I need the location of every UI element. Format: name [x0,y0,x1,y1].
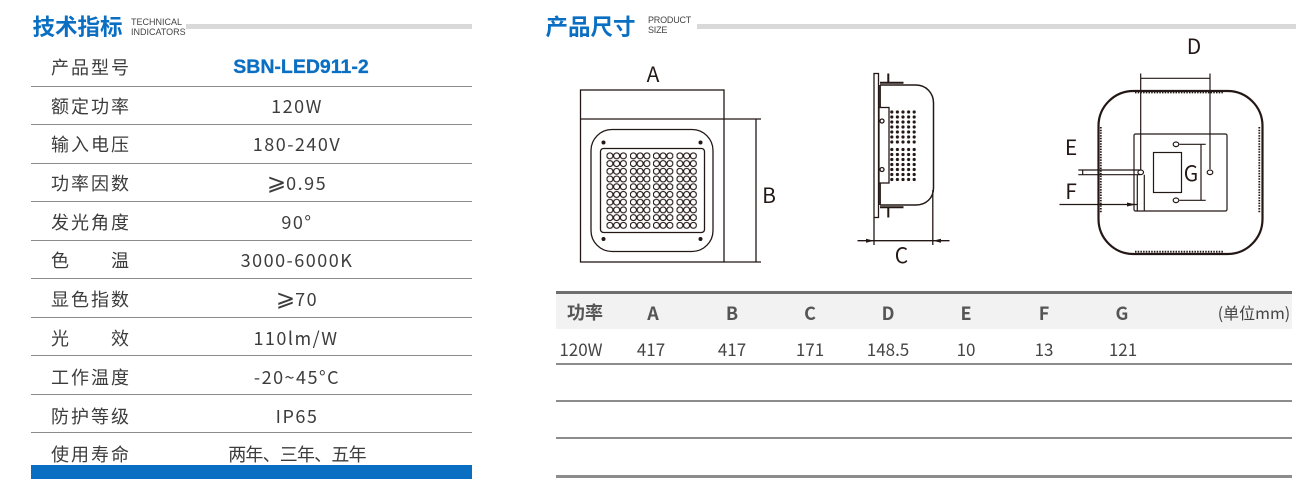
spec row: luminous efficacy [51,325,339,351]
dimension arrows C [866,239,941,243]
spec row: power factor [51,163,327,197]
spec row: working temperature: -20~45°C [254,364,340,390]
panel: product size header [546,10,692,42]
spec row: input voltage [51,131,341,157]
spec row: service life [51,441,366,467]
label C: C [895,240,908,270]
table data: E value: 10 [957,336,975,361]
spec row: service life: 使用寿命 [51,441,131,467]
drawing: rear view [1060,31,1262,254]
spec row: luminous efficacy: 110lm/W [253,325,339,351]
table unit note: (单位mm) [1218,300,1290,324]
table header: D: D [882,300,894,326]
label E: E [1065,132,1077,162]
spec row: input voltage: 输入电压 [51,131,131,157]
table header: C: C [804,300,816,326]
vent dots [889,110,917,182]
table header: G: G [1116,300,1128,326]
table data: G value: 121 [1109,336,1137,361]
LED array [606,152,697,229]
spec row: rated power: 额定功率 [51,93,131,119]
spec row: protection grade: 防护等级 [51,403,131,429]
footer colour bar [31,465,472,479]
spec row: luminous efficacy: 光效 [51,325,171,351]
table header background [556,291,1292,329]
table data: A value: 417 [637,336,665,361]
panel: technical indicators [32,10,186,42]
spec row: power factor: 功率因数 [51,170,131,196]
heading: technical indicators: 技术指标 [32,10,123,42]
panel: size table [556,291,1292,329]
label D: D [1187,31,1201,61]
table header: B: B [726,300,738,326]
table data: F value: 13 [1035,336,1053,361]
label F: F [1065,176,1077,206]
spec row: colour rendering index: ⩾70 [276,279,318,313]
table header: A: A [647,300,659,326]
heading: english subtitle: PRODUCT [648,15,691,25]
table data: C value: 171 [796,336,824,361]
dimension arrow F [1127,202,1136,206]
spec row: rated power: 120W [271,93,323,119]
spec row: colour rendering index: 显色指数 [51,286,131,312]
spec row: beam angle: 90° [281,209,313,235]
table header: power: 功率 [567,299,603,325]
table data: 120W: 120W [559,336,603,361]
spec row: model: 产品型号 [51,54,131,80]
drawing: side view [858,74,950,270]
table data: D value: 148.5 [867,336,909,361]
spec row: colour temperature: 色温 [51,247,171,273]
heading: english subtitle: TECHNICAL [131,17,182,27]
spec row: rated power [51,93,323,119]
spec row: working temperature: 工作温度 [51,364,131,390]
heading: english subtitle [648,15,692,34]
spec row: colour temperature: 3000-6000K [241,247,353,273]
table header: E: E [960,300,972,326]
spec row: working temperature [51,364,340,390]
table data: B value: 417 [718,336,746,361]
heading: english subtitle: SIZE [648,24,667,34]
drawing: front view [580,59,776,262]
spec row: model: SBN-LED911-2 [233,56,369,78]
table header: F: F [1039,300,1049,326]
spec row: beam angle: 发光角度 [51,209,131,235]
spec row: protection grade [51,403,318,429]
label G: G [1184,158,1198,188]
heading: english subtitle [131,17,186,36]
spec row: colour rendering index [51,279,318,313]
label B: B [762,180,776,210]
label A: A [647,59,660,89]
spec row: service life: 两年、三年、五年 [228,441,366,467]
spec row: input voltage: 180-240V [253,131,341,157]
spec row: beam angle [51,209,313,235]
spec row: protection grade: IP65 [276,403,318,429]
heading: english subtitle: INDICATORS [131,26,186,36]
spec row: colour temperature [51,247,353,273]
spec row: power factor: ⩾0.95 [267,163,327,197]
spec row: model [51,54,369,80]
heading: product size: 产品尺寸 [546,10,636,42]
